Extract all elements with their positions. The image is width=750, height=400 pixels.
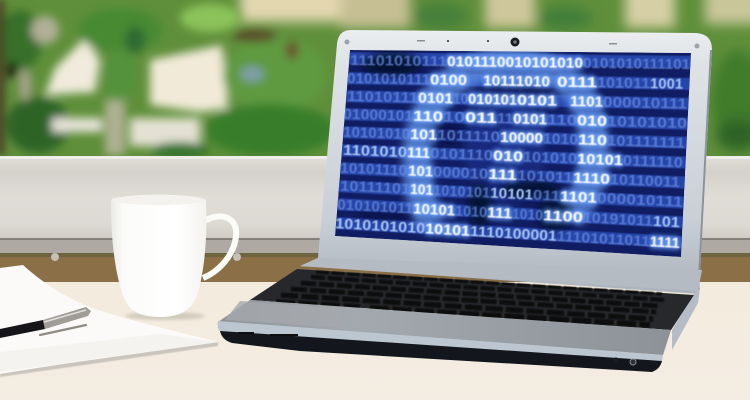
binary row 2 [347, 71, 683, 93]
binary row 3: 000010111 [603, 95, 687, 113]
binary row 7: 101 [408, 163, 433, 181]
screen with binary padlock [335, 50, 695, 257]
binary row 6: 111 [407, 145, 430, 162]
binary row 3: 11010111 [347, 89, 418, 107]
binary row 5: 10000 [500, 130, 543, 147]
keyboard panel [250, 269, 694, 330]
binary row 10: 1110100001 [470, 224, 557, 245]
binary row 10: 1111 [649, 234, 680, 252]
binary row 9: 101 [652, 214, 680, 231]
binary row 4: 110 [413, 109, 443, 126]
binary row 8: 10111101 [340, 179, 411, 198]
binary row 7: 10110011 [610, 172, 680, 191]
binary row 9: 111 [487, 205, 512, 222]
binary row 6: 0101110 [430, 146, 493, 164]
binary row 4: 110 [547, 112, 577, 129]
binary row 9 [338, 199, 680, 228]
binary row 9: 1010 [512, 206, 543, 224]
binary row 9: 1010 [455, 204, 487, 221]
binary row 7: 10101110 [340, 161, 407, 179]
binary row 8: 011 [533, 188, 560, 205]
binary row 10: 1010101010 [335, 216, 426, 237]
icon: coffee mug [111, 195, 236, 320]
binary row 8: 000010111 [597, 191, 683, 211]
binary row 8: 10101 [490, 186, 533, 204]
laptop lid [300, 30, 712, 294]
binary row 9: 10101 [413, 201, 455, 219]
binary row 8: 1101 [560, 189, 597, 207]
binary row 2: 0111 [557, 75, 597, 91]
background: foliage outside window [0, 0, 750, 160]
binary row 8: 101 [410, 182, 433, 199]
binary row 5 [344, 126, 685, 149]
binary row 3 [347, 89, 687, 113]
binary row 4 [343, 107, 687, 132]
binary row 5: 101111111 [607, 133, 685, 152]
binary row 4: 11 [497, 111, 513, 127]
binary row 4: 0101 [513, 111, 547, 128]
binary row 8 [340, 180, 682, 208]
binary row 7: 1110 [573, 170, 610, 188]
binary row 5: 1011110 [437, 128, 500, 146]
papers [0, 265, 218, 377]
binary row 8: 1010101 [433, 183, 490, 202]
binary digits [335, 53, 690, 252]
binary row 1: 11101010111 [350, 53, 447, 70]
laptop base deck [300, 258, 702, 291]
binary row 4: 011 [465, 110, 497, 127]
front edge [218, 321, 663, 362]
binary row 2: 101011 [597, 75, 650, 92]
binary row 7: 101011 [517, 168, 573, 186]
binary row 3: 0101 [517, 93, 557, 110]
binary row 3: 10 [453, 91, 468, 108]
binary row 5: 110 [578, 132, 607, 149]
binary row 4: 10 [443, 110, 465, 126]
laptop [218, 30, 712, 372]
right side of deck [672, 288, 700, 350]
binary row 5: 1010 [543, 131, 578, 148]
binary row 5: 101 [410, 127, 437, 144]
binary row 7: 000010 [433, 165, 488, 183]
binary row 3: 010101 [468, 92, 517, 109]
binary row 10: 10101 [425, 221, 470, 240]
palm rest with touchpad [218, 300, 671, 355]
binary row 4: 01000101 [343, 107, 413, 125]
binary row 6: 101010 [523, 149, 577, 168]
window sill [0, 156, 750, 283]
binary row 4: 010 [577, 113, 607, 130]
binary row 6: 1101010 [343, 143, 407, 161]
underside [220, 331, 662, 372]
binary row 1 [350, 53, 690, 73]
binary row 4: 10101010 [607, 114, 687, 132]
binary row 3: 0101 [418, 91, 453, 107]
binary row 7: 111 [488, 167, 517, 184]
binary row 9: 010101011 [337, 197, 414, 217]
padlock glow [417, 62, 594, 225]
binary row 6 [343, 143, 683, 171]
ports [238, 332, 636, 365]
binary row 9: 1100 [543, 208, 583, 226]
binary row 10 [335, 216, 680, 252]
binary row 1: 0101110010101010 [447, 54, 583, 72]
icon: pen [0, 307, 91, 338]
binary row 5: 10101010 [343, 125, 410, 143]
binary row 9: 10191011 [582, 210, 653, 230]
dark shadows [355, 52, 573, 231]
binary row 2: 0100 [430, 72, 467, 89]
binary row 3: 1101 [570, 94, 603, 111]
webcam and bezel details [344, 38, 700, 48]
binary row 7 [340, 162, 680, 188]
binary row 10: 11101011011 [556, 229, 650, 250]
screen glow rows [335, 58, 695, 243]
table top [0, 282, 750, 400]
binary row 6: 010 [493, 148, 523, 165]
binary row 6: 10101 [577, 152, 623, 169]
binary row 2: 10111010 [483, 73, 550, 90]
binary row 1: 0101010111101 [583, 56, 690, 73]
binary row 2: 1001 [650, 76, 683, 93]
binary row 2: 0101010111 [347, 71, 430, 88]
binary row 6: 0111110 [623, 153, 683, 171]
